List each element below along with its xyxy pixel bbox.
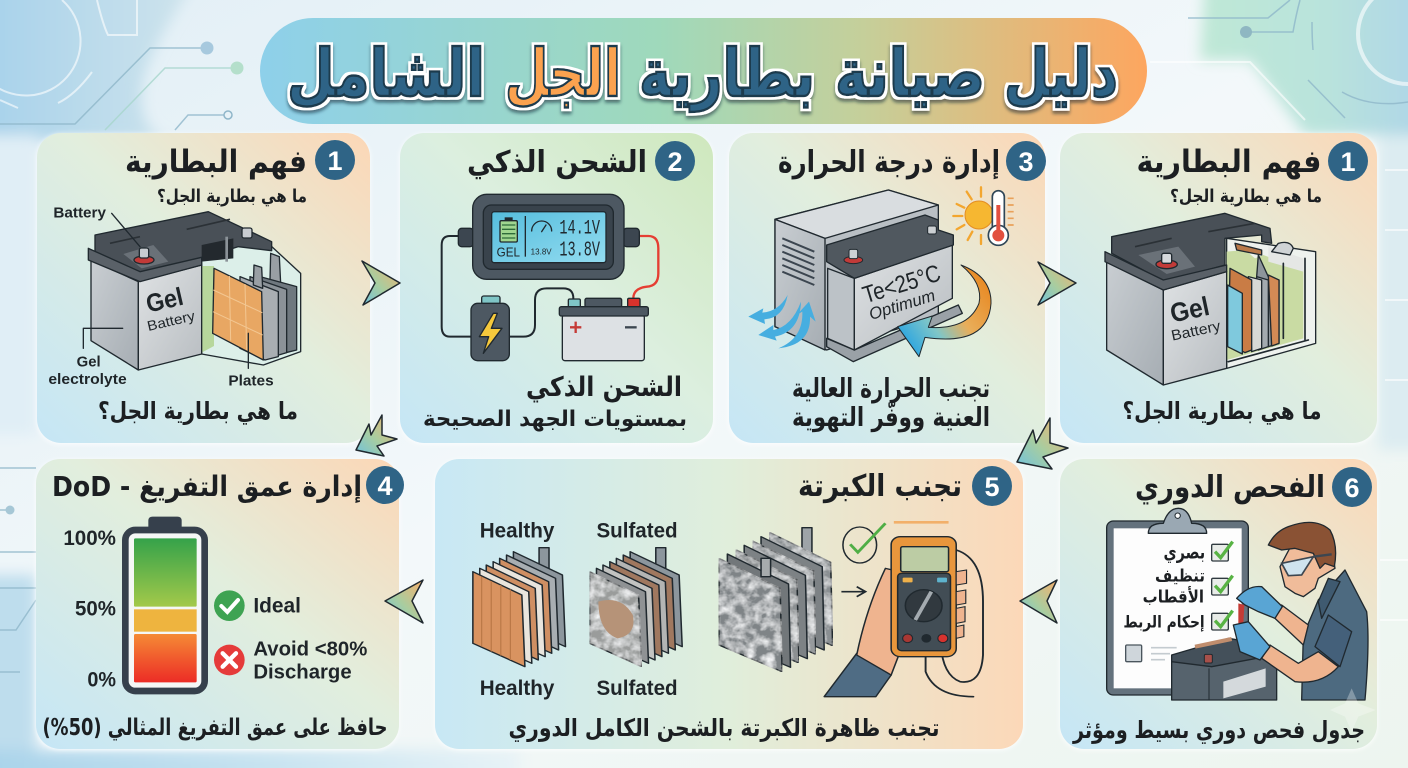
battery cutaway illustration: electrolyte — [48, 372, 127, 388]
heading: تجنب الكبرتة — [798, 469, 962, 504]
curved heat arrow — [898, 265, 991, 357]
step number 5 — [972, 466, 1012, 506]
caption: ما هي بطارية الجل؟ — [1122, 397, 1322, 425]
heading: الشحن الذكي — [467, 145, 647, 180]
caption: حافظ على عمق التفريغ المثالي (50%) — [42, 715, 388, 741]
step number 3: 3 — [1018, 147, 1034, 177]
step number 4 — [366, 466, 404, 504]
battery enclosure illustration: Optimum — [867, 286, 938, 324]
step number 6 — [1332, 467, 1372, 507]
avoid marker: Avoid <80% — [253, 638, 367, 661]
heading: إدارة درجة الحرارة — [778, 145, 1000, 180]
checklist: تنظيف — [1155, 567, 1205, 587]
step number 1 — [315, 140, 355, 180]
plate labels — [480, 518, 678, 700]
sparkle — [1330, 688, 1376, 732]
subheading: ما هي بطارية الجل؟ — [1170, 186, 1322, 207]
checklist — [1123, 542, 1233, 662]
technician — [1233, 522, 1368, 700]
arrow — [841, 587, 866, 597]
heading: فهم البطارية — [125, 144, 307, 180]
step number 2: 2 — [667, 147, 683, 177]
battery cutaway illustration — [1105, 213, 1316, 385]
caption: العنية ووفّر التهوية — [792, 401, 990, 433]
title text: بطارية — [639, 35, 815, 112]
plate labels: Healthy — [480, 518, 555, 542]
caption: الشحن الذكي — [526, 372, 682, 403]
step number 6: 6 — [1344, 473, 1360, 503]
caption: تجنب الحرارة العالية — [792, 374, 990, 404]
charger illustration — [442, 194, 658, 361]
arrow: inspection to sulfation — [1020, 580, 1057, 623]
arrow: panel 1 to 2 — [362, 261, 400, 305]
caption: ما هي بطارية الجل؟ — [98, 397, 298, 425]
battery cutaway illustration: Battery — [53, 205, 107, 221]
battery enclosure illustration: Te<25°C — [860, 260, 944, 309]
caption: بمستويات الجهد الصحيحة — [423, 407, 687, 432]
plate labels: Sulfated — [596, 518, 678, 542]
ideal marker: Ideal — [253, 594, 301, 618]
heading: إدارة عمق التفريغ - DoD — [52, 470, 362, 504]
heavily sulfated plates — [719, 528, 833, 672]
caption — [792, 374, 990, 433]
battery — [1172, 638, 1277, 700]
charger illustration: 13.8V — [531, 247, 552, 256]
battery cutaway illustration: Gel — [1167, 291, 1212, 329]
plate labels: Sulfated — [596, 675, 678, 700]
step number 1: 1 — [1340, 147, 1356, 177]
panel: temperature management — [729, 133, 1046, 443]
cooling airflow arrows — [748, 295, 816, 348]
battery cutaway illustration: Gel — [143, 283, 186, 319]
title text: الجل — [505, 35, 621, 112]
panel: understanding the battery (right) — [1060, 133, 1377, 443]
panel: understanding the battery (left) — [37, 133, 370, 443]
scale labels — [63, 526, 116, 692]
title text: صيانة — [835, 35, 985, 112]
battery enclosure illustration — [748, 187, 1014, 362]
panel: smart charging — [400, 133, 713, 443]
panel: depth of discharge — [36, 459, 404, 749]
checklist: إحكام الربط — [1123, 612, 1205, 632]
battery gauge — [63, 517, 367, 692]
healthy plates — [473, 548, 565, 667]
heading: فهم البطارية — [1136, 144, 1322, 180]
scale labels: 50% — [75, 597, 116, 621]
step number 3 — [1006, 141, 1046, 181]
title text: دليل — [1004, 35, 1118, 112]
battery cutaway illustration — [48, 205, 301, 389]
arrow: panel 3 to right panel — [1038, 262, 1076, 305]
step number 5: 5 — [984, 472, 1000, 502]
arrow: sulfation to discharge — [385, 580, 423, 623]
panel: periodic inspection — [1060, 459, 1377, 749]
charger illustration: 13.8V — [559, 239, 600, 263]
charger illustration: GEL — [497, 246, 520, 260]
arrow: discharge to panel 1 — [356, 415, 397, 456]
title banner — [260, 18, 1147, 124]
checklist: بصري — [1163, 542, 1205, 564]
subheading: ما هي بطارية الجل؟ — [157, 186, 307, 207]
title text: الشامل — [287, 35, 485, 112]
avoid marker — [214, 638, 367, 683]
heading: الفحص الدوري — [1135, 470, 1325, 505]
avoid marker: Discharge — [253, 660, 352, 683]
caption: تجنب ظاهرة الكبرتة بالشحن الكامل الدوري — [508, 714, 940, 742]
step number 2 — [655, 141, 695, 181]
arrow: right panel down to inspection — [1017, 418, 1068, 469]
battery cutaway illustration: Gel — [77, 355, 101, 371]
ideal marker — [214, 590, 301, 621]
plate labels: Healthy — [480, 675, 555, 700]
scale labels: 100% — [63, 526, 116, 550]
battery cutaway illustration: Plates — [228, 373, 274, 389]
charger illustration: 14.1V — [559, 217, 600, 240]
title text — [287, 35, 1118, 112]
sun — [953, 187, 993, 244]
clipboard and technician illustration — [1107, 508, 1376, 732]
checklist: الأقطاب — [1143, 585, 1204, 607]
caption — [423, 372, 687, 432]
panel: avoid sulfation — [435, 459, 1023, 749]
battery cutaway illustration: Battery — [1170, 318, 1223, 345]
thermometer — [988, 191, 1014, 245]
sulfated plates — [590, 548, 682, 667]
scale labels: 0% — [87, 668, 116, 692]
step number 4: 4 — [377, 471, 393, 501]
battery cutaway illustration: Battery — [145, 307, 196, 334]
check badge — [843, 522, 949, 563]
step number 1: 1 — [327, 146, 343, 176]
plate comparison and multimeter illustration — [473, 518, 983, 700]
hand with multimeter — [824, 537, 983, 697]
step number 1 — [1328, 141, 1368, 181]
